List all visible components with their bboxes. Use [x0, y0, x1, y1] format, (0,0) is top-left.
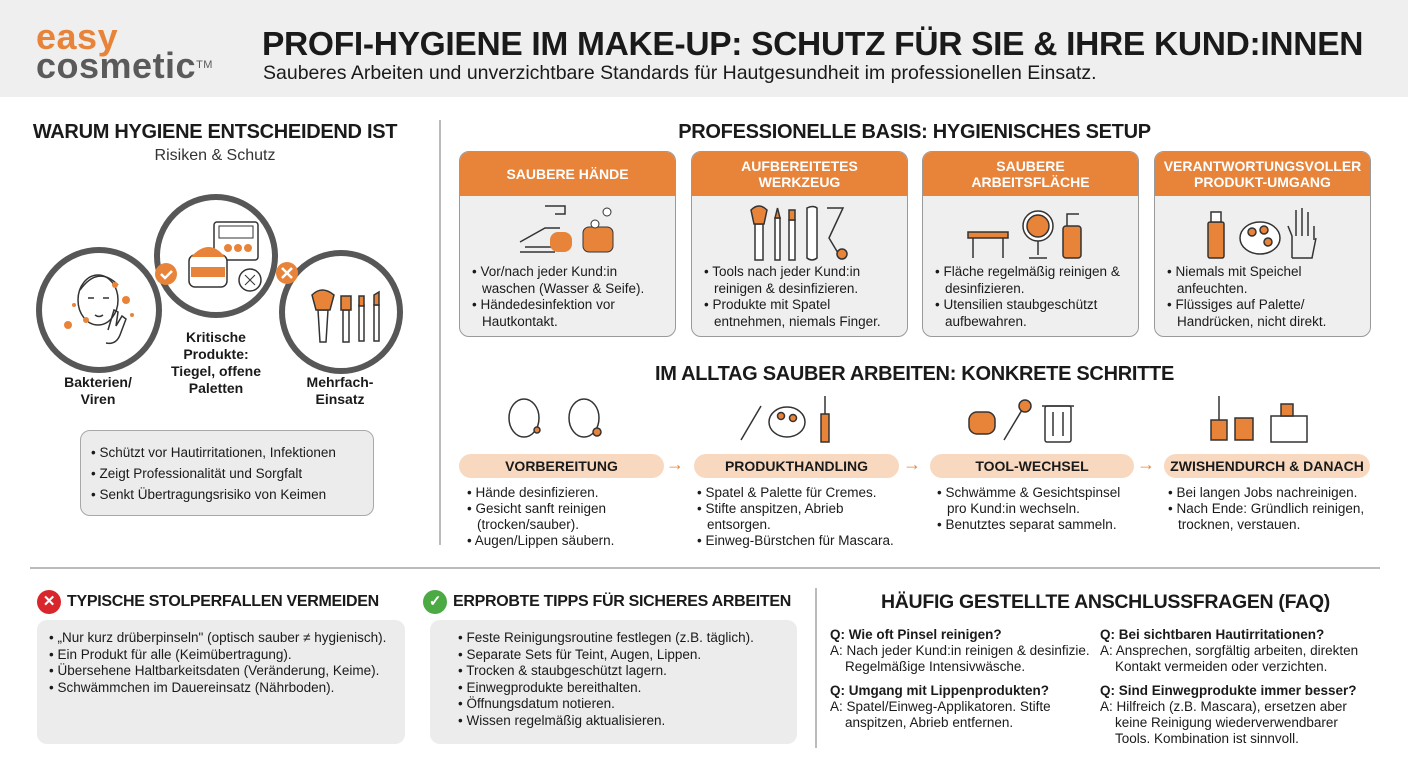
- step: zwishendurch: ZWISHENDURCH & DANACH: [1170, 458, 1364, 474]
- step text 4: Nach Ende: Gründlich reinigen, trocknen, verstauen.: [1176, 501, 1364, 532]
- heading: HÄUFIG GESTELLTE ANSCHLUSSFRAGEN (FAQ): [881, 591, 1330, 613]
- heading with x icon: [37, 590, 379, 614]
- list box: Feste Reinigungsroutine festlegen (z.B. täglich).: [466, 630, 754, 645]
- step: tool-wechsel: [930, 454, 1134, 478]
- card: produkt-umgang: Flüssiges auf Palette/ Handrücken, nicht direkt.: [1175, 297, 1326, 328]
- faq col 2: [1100, 627, 1358, 746]
- label: bakterien: Viren: [81, 391, 115, 407]
- step text 1: Hände desinfizieren.: [475, 485, 599, 500]
- card: saubere haende: SAUBERE HÄNDE: [506, 166, 629, 182]
- card: saubere haende: Vor/nach jeder Kund:in waschen (Wasser & Seife).: [480, 264, 644, 296]
- icon: table mirror spray: [967, 210, 1082, 259]
- card: produkt-umgang: [1154, 151, 1371, 337]
- card: saubere haende: [459, 151, 676, 337]
- step text 3: Benutztes separat sammeln.: [945, 517, 1117, 532]
- list box: Übersehene Haltbarkeitsdaten (Veränderung, Keime).: [57, 663, 379, 678]
- faq col 2: Q: Sind Einwegprodukte immer besser?: [1100, 683, 1357, 698]
- list box: Ein Produkt für alle (Keimübertragung).: [57, 646, 292, 662]
- card: produkt-umgang: PRODUKT-UMGANG: [1194, 174, 1331, 190]
- benefits box: Schützt vor Hautirritationen, Infektionen: [99, 445, 336, 460]
- step: zwishendurch: [1164, 454, 1370, 478]
- card: arbeitsflaeche: [922, 151, 1139, 337]
- label: kritische produkte: Kritische Produkte: Tiegel, offene Paletten: [171, 329, 261, 396]
- list box: Separate Sets für Teint, Augen, Lippen.: [466, 646, 701, 662]
- panel: warum hygiene: [32, 121, 403, 516]
- heading with check icon: ✓: [429, 593, 441, 610]
- panel: tipps: [423, 590, 797, 744]
- faq col 1: A: Nach jeder Kund:in reinigen & desinfizie. Regelmäßige Intensivwäsche.: [830, 643, 1090, 674]
- card: produkt-umgang: VERANTWORTUNGSVOLLER: [1164, 158, 1361, 174]
- logo: easy: [36, 16, 118, 57]
- list box: Schwämmchen im Dauereinsatz (Nährboden).: [57, 680, 334, 694]
- step text 3: [938, 485, 1120, 532]
- label: mehrfach: Einsatz: [315, 391, 364, 407]
- icon: check badge: [155, 263, 177, 285]
- icon: faces: [509, 399, 601, 437]
- step: tool-wechsel: TOOL-WECHSEL: [975, 458, 1089, 474]
- faq col 2: A: Ansprechen, sorgfältig arbeiten, direkten Kontakt vermeiden oder verzichten.: [1100, 643, 1358, 674]
- step icons: [508, 396, 1308, 443]
- subtitle: Sauberes Arbeiten und unverzichtbare Standards für Hautgesundheit im professionellen Einsatz.: [263, 62, 1097, 84]
- subheading: Risiken & Schutz: [155, 147, 275, 164]
- step: vorbereitung: [459, 454, 664, 478]
- logo: [36, 16, 213, 86]
- list box: [430, 620, 797, 744]
- circles diagram: [36, 194, 403, 374]
- list box: „Nur kurz drüberpinseln" (optisch sauber ≠ hygienisch).: [57, 630, 386, 645]
- icon: cleaning: [1211, 396, 1307, 442]
- list box: Wissen regelmäßig aktualisieren.: [466, 712, 665, 728]
- step text 4: [1168, 485, 1364, 532]
- icon: handwash: [520, 205, 614, 253]
- card: saubere haende: Händedesinfektion vor Hautkontakt.: [480, 297, 615, 328]
- card: werkzeug: WERKZEUG: [759, 174, 840, 190]
- icon: brushes: [312, 290, 379, 342]
- step text 1: [468, 485, 614, 548]
- card: produkt-umgang: Niemals mit Speichel anfeuchten.: [1175, 264, 1302, 296]
- step text 2: Einweg-Bürstchen für Mascara.: [705, 533, 894, 548]
- list box: Einwegprodukte bereithalten.: [466, 680, 641, 694]
- label: mehrfach: Mehrfach-: [307, 374, 373, 390]
- arrow: →: [903, 454, 921, 474]
- card: arbeitsflaeche: Fläche regelmäßig reinigen & desinfizieren.: [943, 264, 1120, 296]
- heading: WARUM HYGIENE ENTSCHEIDEND IST: [33, 121, 397, 143]
- card: arbeitsflaeche: ARBEITSFLÄCHE: [971, 174, 1090, 190]
- arrow: →: [666, 454, 684, 474]
- title: PROFI-HYGIENE IM MAKE-UP: SCHUTZ FÜR SIE & IHRE KUND:INNEN: [262, 26, 1363, 63]
- heading with check icon: ERPROBTE TIPPS FÜR SICHERES ARBEITEN: [453, 593, 791, 610]
- card: werkzeug: AUFBEREITETES: [741, 158, 858, 174]
- label: bakterien: [64, 374, 132, 407]
- icon: jar palette: [189, 222, 261, 291]
- step text 4: Bei langen Jobs nachreinigen.: [1176, 485, 1357, 500]
- panel: faq: [830, 591, 1358, 746]
- icon: sponge brush bin: [969, 400, 1074, 442]
- heading: schritte: IM ALLTAG SAUBER ARBEITEN: KONKRETE SCHRITTE: [655, 363, 1174, 385]
- arrow: →: [1137, 454, 1155, 474]
- icon: spatula palette mascara: [741, 396, 829, 442]
- step text 3: Schwämme & Gesichtspinsel pro Kund:in wechseln.: [945, 485, 1120, 516]
- faq col 2: A: Hilfreich (z.B. Mascara), ersetzen aber keine Reinigung wiederverwendbarer Tools. Kombination ist sinnvoll.: [1100, 699, 1347, 746]
- card: werkzeug: Tools nach jeder Kund:in reinigen & desinfizieren.: [712, 264, 860, 296]
- card: werkzeug: [691, 151, 908, 337]
- heading with x icon: ✕: [43, 593, 55, 610]
- faq col 2: Q: Bei sichtbaren Hautirritationen?: [1100, 627, 1324, 642]
- faq col 1: A: Spatel/Einweg-Applikatoren. Stifte anspitzen, Abrieb entfernen.: [830, 699, 1051, 730]
- label: mehrfach: [307, 374, 373, 407]
- icon: bottle palette hand: [1207, 208, 1317, 259]
- step text 1: Gesicht sanft reinigen (trocken/sauber).: [475, 501, 606, 532]
- card: arbeitsflaeche: Utensilien staubgeschützt aufbewahren.: [943, 297, 1097, 328]
- panel: stolperfallen: [37, 590, 405, 744]
- label: bakterien: Bakterien/: [64, 374, 132, 390]
- faq col 1: [830, 627, 1090, 730]
- benefits box: Zeigt Professionalität und Sorgfalt: [99, 466, 302, 481]
- benefits box: [80, 430, 374, 516]
- step text 2: Spatel & Palette für Cremes.: [705, 485, 877, 500]
- icon: x badge: [276, 262, 298, 284]
- benefits box: Senkt Übertragungsrisiko von Keimen: [99, 487, 326, 502]
- list box: [37, 620, 405, 744]
- step: vorbereitung: VORBEREITUNG: [505, 458, 618, 474]
- step text 2: [698, 485, 894, 548]
- heading: setup: PROFESSIONELLE BASIS: HYGIENISCHES SETUP: [678, 121, 1151, 143]
- faq col 1: Q: Umgang mit Lippenprodukten?: [830, 683, 1049, 698]
- step text 2: Stifte anspitzen, Abrieb entsorgen.: [705, 501, 844, 532]
- card: werkzeug: Produkte mit Spatel entnehmen, niemals Finger.: [712, 297, 881, 328]
- heading with x icon: TYPISCHE STOLPERFALLEN VERMEIDEN: [67, 593, 379, 610]
- heading with check icon: [423, 590, 791, 614]
- step text 1: Augen/Lippen säubern.: [475, 533, 614, 548]
- list box: Trocken & staubgeschützt lagern.: [466, 663, 667, 678]
- header band: [0, 0, 1408, 97]
- icon: face bacteria: [78, 275, 126, 343]
- list box: Öffnungsdatum notieren.: [466, 696, 615, 711]
- card: arbeitsflaeche: SAUBERE: [996, 158, 1065, 174]
- step: produkthandling: [694, 454, 899, 478]
- step: produkthandling: PRODUKTHANDLING: [725, 458, 868, 474]
- logo: cosmeticTM: [36, 45, 213, 86]
- icon: tools: [750, 205, 848, 261]
- faq col 1: Q: Wie oft Pinsel reinigen?: [830, 627, 1002, 642]
